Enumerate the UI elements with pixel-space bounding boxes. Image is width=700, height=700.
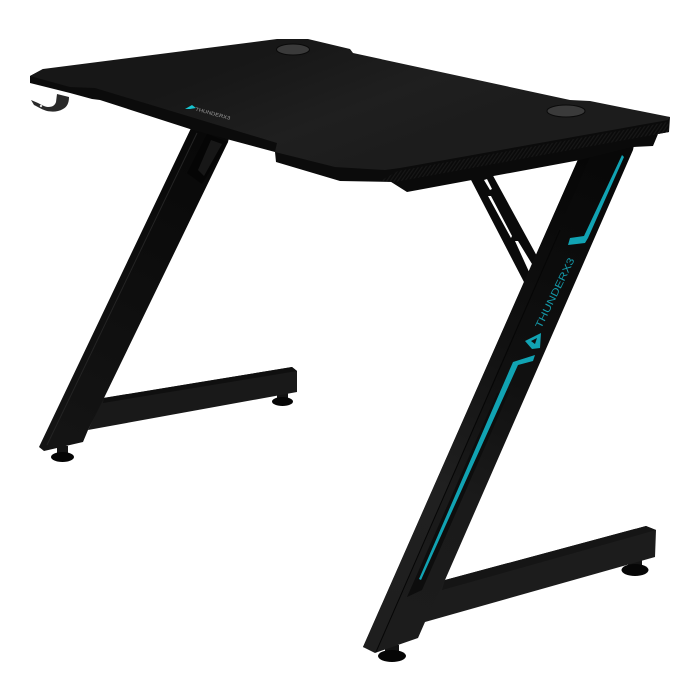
tabletop underside support: [388, 134, 658, 192]
foot: back right: [622, 558, 648, 576]
desk logo text: THUNDERX3: [194, 107, 231, 122]
cable grommet: right: [547, 105, 585, 117]
cable grommet: back: [276, 44, 310, 55]
tabletop: [30, 39, 670, 182]
left leg: [39, 124, 297, 451]
left leg: bracket inset: [198, 140, 222, 176]
left leg: diagonal: [39, 124, 230, 451]
headset hook: [31, 94, 69, 112]
right leg: side face: [363, 155, 591, 652]
right leg: lower cyan stripe: [419, 355, 535, 580]
right leg: channel around lower stripe: [407, 390, 510, 597]
brand text on leg: THUNDERX3: [534, 256, 578, 330]
left leg: edge highlight: [47, 133, 197, 445]
tabletop: edge band and silhouette: [30, 69, 670, 182]
tabletop: carbon edge right: [380, 122, 669, 182]
right leg: foot bar: [418, 526, 656, 622]
foot: back left: [272, 393, 293, 406]
tabletop: top surface: [30, 39, 670, 170]
left leg: upper bracket: [187, 134, 228, 184]
right leg: bar top face: [442, 526, 656, 590]
right leg: [363, 140, 656, 653]
brace slot: top: [484, 179, 492, 190]
brace slot: middle: [488, 196, 512, 238]
right leg: diagonal: [363, 140, 635, 653]
left leg: foot bar: [88, 367, 297, 430]
desk logo mark: [185, 105, 196, 109]
left leg: bar top face: [103, 367, 297, 403]
right leg brace with slots: [470, 172, 538, 284]
right leg: upper cyan stripe: [568, 155, 624, 245]
icon: ThunderX3 shield logo: [525, 333, 541, 349]
foot: front left: [51, 446, 74, 462]
right leg: edge line: [376, 230, 560, 652]
brace slot: bottom: [515, 241, 532, 274]
foot: front right: [378, 645, 406, 662]
